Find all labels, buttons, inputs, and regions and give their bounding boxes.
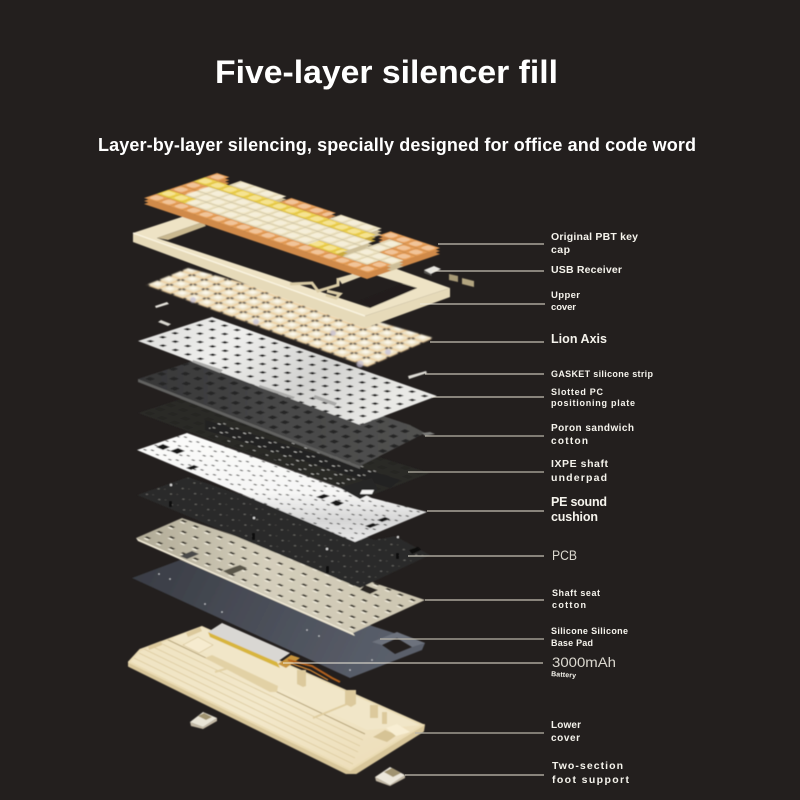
subtitle: Layer-by-layer silencing, specially designed for office and code word (98, 135, 696, 155)
callout: IXPE shaft underpad: underpad (551, 472, 607, 484)
callout: battery (283, 654, 616, 680)
callout: gasket silicone strip: GASKET silicone strip (551, 369, 654, 379)
callout: lower cover: cover (551, 733, 580, 744)
lion axis switches (146, 268, 434, 368)
callout: shaft seat cotton: cotton (552, 600, 586, 610)
callout: two-section foot support: Two-section (552, 760, 623, 772)
callout: poron sandwich cotton: cotton (551, 436, 588, 447)
title: Five-layer silencer fill (215, 54, 558, 90)
callout: silicone base pad: Base Pad (551, 638, 593, 648)
layer: PCB (136, 518, 425, 636)
layer: lower cover (129, 627, 424, 773)
gasket silicone strips (155, 302, 427, 379)
layer: silicone base pad (132, 560, 425, 678)
callout: PE sound cushion: cushion (551, 510, 598, 524)
callout: shaft seat cotton: Shaft seat (552, 588, 600, 598)
callout: original PBT key cap: cap (551, 244, 570, 256)
callout: silicone base pad (380, 626, 628, 648)
upper cover frame (133, 205, 450, 328)
callout: upper cover: cover (551, 302, 576, 313)
callout: poron sandwich cotton (425, 423, 634, 447)
layer: white plate (138, 317, 437, 425)
callout: two-section foot support: foot support (552, 774, 630, 786)
USB receiver and small parts (424, 266, 474, 287)
callout: poron sandwich cotton: Poron sandwich (551, 423, 634, 434)
foot support right (375, 767, 405, 786)
callout: shaft seat cotton (425, 588, 600, 610)
exploded keyboard diagram (129, 173, 474, 786)
callout: slotted PC positioning plate: Slotted PC (551, 387, 604, 397)
callout: PCB: PCB (552, 548, 577, 563)
callout: PE sound cushion: PE sound (551, 495, 607, 509)
layer: white sound cushion (137, 433, 427, 542)
keycaps (144, 173, 440, 279)
callout: two-section foot support (405, 760, 630, 786)
callout: lower cover (415, 720, 581, 744)
callout: original PBT key cap: Original PBT key (551, 231, 638, 243)
callout: silicone base pad: Silicone Silicone (551, 626, 628, 636)
callout: battery: 3000mAh (552, 654, 616, 670)
foot support left (190, 712, 217, 729)
callout: original PBT key cap (438, 231, 638, 256)
callout: battery: Battery (551, 671, 576, 680)
callout: upper cover: Upper (551, 290, 580, 301)
layer: slotted PC positioning plate (dark) (138, 357, 435, 469)
callout: upper cover (420, 290, 580, 313)
callout: lower cover: Lower (551, 720, 581, 731)
callout: IXPE shaft underpad: IXPE shaft (551, 458, 608, 470)
callout: IXPE shaft underpad (408, 458, 608, 484)
callout: PE sound cushion (427, 495, 607, 524)
callout: slotted PC positioning plate: positioning plate (551, 398, 635, 408)
layer: PE sound cushion (black) (137, 477, 430, 588)
layer: IXPE shaft underpad (poron dark sheet) (138, 397, 430, 497)
callout: slotted PC positioning plate (432, 387, 635, 408)
battery (208, 623, 340, 682)
callout: lion axis: Lion Axis (551, 332, 607, 346)
callout: USB receiver: USB Receiver (551, 264, 622, 276)
